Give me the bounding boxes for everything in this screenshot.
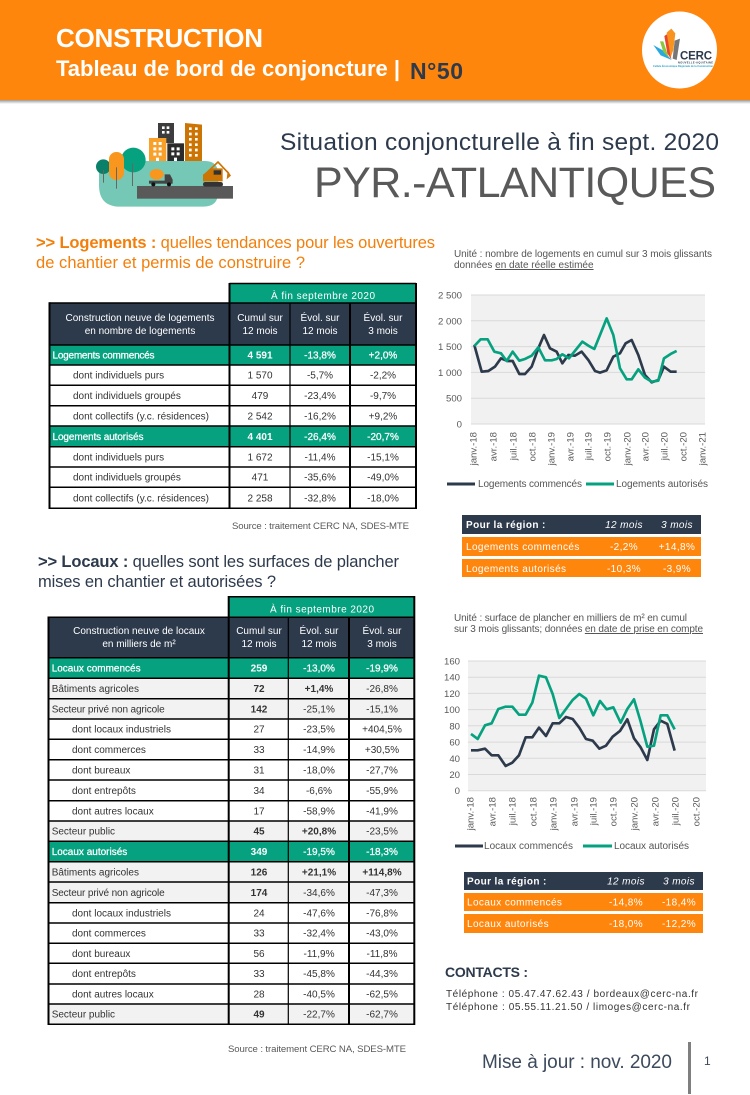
row: locaux industriels: dont locaux industriels bbox=[72, 725, 171, 736]
series: locaux autorisés bbox=[471, 676, 675, 747]
row: locaux industriels: -23,5% bbox=[303, 725, 335, 736]
row: autres locaux: dont autres locaux bbox=[72, 806, 154, 817]
header cells: Évol. sur bbox=[363, 624, 402, 637]
row: collectifs: -32,8% bbox=[304, 493, 336, 504]
y axis labels: 1 500 bbox=[438, 342, 462, 353]
line chart: locaux bbox=[444, 656, 706, 831]
header cells bbox=[66, 289, 403, 337]
region table: locaux: -14,8% bbox=[609, 898, 643, 908]
y axis labels: 80 bbox=[449, 721, 460, 732]
header cells: 3 mois bbox=[367, 639, 397, 650]
x axis labels: janv.-19 bbox=[546, 432, 558, 466]
row: individuels purs: 1 570 bbox=[247, 371, 273, 382]
footer: page number: 1 bbox=[704, 1054, 711, 1068]
heading: department: PYR.-ATLANTIQUES bbox=[314, 159, 716, 207]
row: individuels groupés: -23,4% bbox=[304, 391, 336, 402]
header cells: Évol. sur bbox=[364, 311, 403, 324]
header cells: 3 mois bbox=[368, 326, 398, 337]
row: logements commencés: -13,8% bbox=[304, 350, 336, 362]
row: individuels purs bbox=[73, 452, 399, 463]
legend: logements: Logements autorisés bbox=[616, 479, 708, 490]
y axis labels: 1 000 bbox=[438, 368, 462, 379]
x axis labels: avr.-18 bbox=[488, 797, 498, 826]
row: locaux autorisés: -18,3% bbox=[366, 847, 398, 858]
header cells: Évol. sur bbox=[301, 311, 340, 324]
row: secteur privé bbox=[48, 699, 414, 719]
region table: logements: Pour la région : bbox=[466, 520, 546, 531]
y axis labels bbox=[444, 656, 460, 797]
region table: locaux: -12,2% bbox=[662, 919, 696, 930]
row: locaux autorisés: -19,5% bbox=[303, 847, 335, 858]
region table: logements bbox=[462, 515, 701, 577]
region table: locaux: Locaux commencés bbox=[467, 898, 562, 908]
x axis labels: janv.-20 bbox=[630, 797, 640, 831]
legend: logements bbox=[447, 479, 708, 490]
row: locaux industriels bbox=[72, 725, 402, 736]
x axis labels: avr.-20 bbox=[640, 432, 652, 461]
row: individuels groupés bbox=[73, 473, 399, 484]
contacts: CONTACTS : bbox=[445, 964, 528, 980]
row: bureaux: -11,8% bbox=[367, 949, 398, 960]
y axis labels: 20 bbox=[449, 770, 460, 781]
header cells: 12 mois bbox=[301, 639, 337, 650]
logo: CERC bbox=[642, 12, 717, 88]
row: locaux commencés: Locaux commencés bbox=[52, 664, 141, 674]
row: entrepôts: -6,6% bbox=[306, 786, 332, 797]
row: commerces: dont commerces bbox=[72, 929, 146, 940]
region table: logements: +14,8% bbox=[659, 542, 695, 553]
row: individuels groupés: -9,7% bbox=[370, 391, 396, 402]
row: bâtiments agricoles bbox=[48, 678, 414, 699]
x axis labels: juil.-18 bbox=[508, 797, 518, 826]
row: individuels groupés: 479 bbox=[252, 391, 269, 402]
x axis labels: oct.-18 bbox=[528, 797, 540, 826]
row: locaux commencés: 259 bbox=[251, 664, 268, 674]
row: locaux autorisés: Locaux autorisés bbox=[52, 847, 127, 858]
row: locaux industriels: 27 bbox=[253, 725, 265, 736]
contacts: Téléphone : 05.47.47.62.43 / bordeaux@cerc-na.fr bbox=[446, 989, 699, 1000]
region table: logements: Logements commencés bbox=[466, 542, 580, 553]
line chart: logements bbox=[438, 290, 708, 466]
header cells: Cumul sur bbox=[236, 626, 282, 637]
row: individuels purs bbox=[73, 371, 396, 382]
y axis labels: 140 bbox=[444, 673, 460, 684]
heading: locaux: mises en chantier et autorisées ? bbox=[38, 573, 276, 591]
row: bâtiments agricoles: 126 bbox=[251, 867, 268, 878]
x axis labels: avr.-20 bbox=[650, 797, 662, 826]
row: bâtiments agricoles: -26,8% bbox=[366, 684, 398, 695]
y axis labels: 2 500 bbox=[438, 290, 462, 302]
row: logements autorisés bbox=[50, 426, 416, 447]
region table: locaux: Locaux autorisés bbox=[467, 919, 549, 930]
x axis labels: oct.-18 bbox=[528, 432, 538, 461]
row: logements commencés bbox=[50, 345, 416, 365]
x axis labels: janv.-19 bbox=[548, 797, 560, 831]
row: autres locaux: 28 bbox=[253, 990, 265, 1000]
header cells: en nombre de logements bbox=[85, 326, 195, 337]
y axis labels: 2 000 bbox=[438, 316, 462, 327]
x axis labels: janv.-18 bbox=[466, 797, 476, 831]
row: individuels groupés: 471 bbox=[252, 473, 269, 484]
row: bâtiments agricoles: Bâtiments agricoles bbox=[52, 867, 139, 878]
row: bâtiments agricoles: +21,1% bbox=[302, 867, 336, 878]
row: bureaux: 31 bbox=[253, 765, 265, 776]
row: bâtiments agricoles bbox=[48, 862, 414, 882]
icon: city and construction illustration bbox=[96, 123, 233, 207]
row: secteur public: +20,8% bbox=[302, 827, 336, 838]
y axis labels: 100 bbox=[444, 705, 460, 716]
region table: logements: -3,9% bbox=[663, 564, 691, 575]
row: locaux commencés bbox=[48, 658, 414, 678]
row: entrepôts bbox=[72, 969, 398, 980]
row: secteur public: -23,5% bbox=[366, 827, 398, 838]
series: logements commencés bbox=[474, 335, 677, 382]
region table: locaux: 3 mois bbox=[663, 876, 695, 888]
row: locaux industriels: -47,6% bbox=[303, 908, 335, 919]
x axis labels: juil.-20 bbox=[660, 432, 670, 461]
row: entrepôts: -45,8% bbox=[303, 969, 335, 980]
table: logements bbox=[50, 283, 416, 509]
row: logements commencés: 4 591 bbox=[247, 350, 273, 362]
row: individuels purs: dont individuels purs bbox=[73, 371, 164, 382]
logo: CERC: NOUVELLE-AQUITAINE bbox=[678, 60, 713, 64]
issue number: N°50 bbox=[410, 58, 463, 84]
row: commerces: 33 bbox=[253, 745, 265, 756]
series: logements autorisés bbox=[474, 318, 677, 382]
header cells: 12 mois bbox=[302, 326, 338, 337]
row: locaux industriels bbox=[72, 908, 398, 919]
row: individuels purs: -11,4% bbox=[305, 452, 336, 463]
header cells bbox=[73, 602, 402, 650]
row: bureaux: -18,0% bbox=[303, 765, 335, 776]
row: collectifs bbox=[73, 493, 399, 504]
title: construction: CONSTRUCTION bbox=[56, 23, 263, 53]
region table: locaux: -18,4% bbox=[662, 898, 696, 908]
row: secteur public bbox=[48, 821, 414, 841]
row: autres locaux: dont autres locaux bbox=[72, 990, 154, 1000]
row: locaux industriels: dont locaux industriels bbox=[72, 908, 171, 919]
region table: locaux: Pour la région : bbox=[467, 876, 547, 888]
region table: logements: 12 mois bbox=[605, 520, 643, 531]
y axis labels: 160 bbox=[444, 656, 460, 668]
source: logements: Source : traitement CERC NA, SDES-MTE bbox=[232, 521, 409, 532]
row: individuels groupés: -35,6% bbox=[304, 473, 336, 484]
y axis labels: 40 bbox=[449, 754, 460, 765]
row: logements autorisés: -20,7% bbox=[367, 432, 399, 443]
x axis labels bbox=[468, 432, 708, 466]
row: bureaux bbox=[72, 765, 398, 776]
row: logements commencés: +2,0% bbox=[369, 350, 397, 362]
source: locaux: Source : traitement CERC NA, SDES-MTE bbox=[228, 1044, 406, 1055]
row: entrepôts: dont entrepôts bbox=[72, 786, 136, 797]
row: secteur public bbox=[48, 1004, 414, 1024]
legend: logements: Logements commencés bbox=[478, 479, 582, 490]
footer: update date: Mise à jour : nov. 2020 bbox=[482, 1052, 672, 1073]
row: entrepôts: dont entrepôts bbox=[72, 969, 136, 980]
row: entrepôts: -55,9% bbox=[366, 786, 398, 797]
chart note: logements: Unité : nombre de logements en cumul sur 3 mois glissants bbox=[454, 249, 712, 260]
x axis labels: avr.-19 bbox=[570, 797, 580, 826]
row: autres locaux: -40,5% bbox=[303, 990, 335, 1000]
header cells: en milliers de m² bbox=[102, 639, 176, 650]
row: individuels groupés: dont individuels groupés bbox=[73, 391, 181, 402]
row: collectifs: dont collectifs (y.c. résidences) bbox=[73, 411, 209, 422]
row: logements autorisés: -26,4% bbox=[304, 432, 336, 443]
subtitle: Tableau de bord de conjoncture | bbox=[56, 56, 400, 81]
chart note: logements: données en date réelle estimée bbox=[454, 260, 594, 271]
row: secteur public: -22,7% bbox=[303, 1010, 335, 1021]
y axis labels: 60 bbox=[449, 738, 460, 749]
row: commerces: -14,9% bbox=[303, 745, 335, 756]
heading: locaux bbox=[38, 553, 400, 591]
region table: logements: Logements autorisés bbox=[466, 564, 566, 575]
row: locaux commencés: -13,0% bbox=[303, 664, 335, 674]
row: individuels purs: -2,2% bbox=[370, 371, 396, 382]
row: individuels purs: dont individuels purs bbox=[73, 452, 164, 463]
heading: locaux: >> Locaux : quelles sont les surfaces de plancher bbox=[38, 553, 400, 571]
row: bureaux: 56 bbox=[253, 949, 265, 960]
header cells: 12 mois bbox=[241, 639, 277, 650]
row: individuels groupés: -49,0% bbox=[367, 473, 399, 484]
row: collectifs: -16,2% bbox=[304, 411, 336, 422]
y axis labels: 120 bbox=[444, 689, 460, 700]
row: commerces bbox=[72, 929, 398, 940]
row: individuels groupés: dont individuels groupés bbox=[73, 473, 181, 484]
legend: locaux bbox=[455, 841, 689, 852]
header cells: À fin septembre 2020 bbox=[271, 289, 375, 302]
heading: logements bbox=[36, 234, 435, 272]
contacts bbox=[445, 964, 699, 1013]
header cells: Construction neuve de locaux bbox=[73, 626, 205, 637]
row: bureaux: dont bureaux bbox=[72, 765, 130, 776]
row: entrepôts: 33 bbox=[253, 969, 265, 980]
contacts: Téléphone : 05.55.11.21.50 / limoges@cerc-na.fr bbox=[446, 1002, 691, 1013]
legend: locaux: Locaux commencés bbox=[484, 841, 573, 852]
row: autres locaux: 17 bbox=[253, 806, 265, 817]
row: locaux autorisés: 349 bbox=[251, 847, 268, 858]
x axis labels: oct.-20 bbox=[678, 432, 690, 461]
y axis labels: 0 bbox=[455, 786, 460, 797]
row: bureaux: -11,9% bbox=[304, 949, 335, 960]
row: commerces: 33 bbox=[253, 929, 265, 940]
row: commerces: dont commerces bbox=[72, 745, 146, 756]
heading: situation: Situation conjoncturelle à fin sept. 2020 bbox=[280, 129, 719, 156]
row: autres locaux: -41,9% bbox=[366, 806, 398, 817]
row: locaux autorisés bbox=[48, 841, 414, 862]
row: collectifs: 2 258 bbox=[247, 493, 273, 504]
row: secteur privé: Secteur privé non agricole bbox=[52, 888, 165, 899]
y axis labels: 500 bbox=[446, 394, 462, 405]
row: secteur privé: -34,6% bbox=[303, 888, 335, 899]
heading: logements: >> Logements : quelles tendances pour les ouvertures bbox=[36, 234, 435, 252]
row: secteur privé bbox=[48, 882, 414, 903]
row: entrepôts: -44,3% bbox=[366, 969, 398, 980]
row: bureaux bbox=[72, 949, 398, 960]
x axis labels: janv.-18 bbox=[468, 432, 480, 466]
row: bureaux: dont bureaux bbox=[72, 949, 130, 960]
row: bâtiments agricoles: +1,4% bbox=[305, 684, 333, 695]
heading: logements: de chantier et permis de construire ? bbox=[36, 254, 305, 272]
row: locaux industriels: +404,5% bbox=[362, 725, 402, 736]
chart note: locaux: Unité : surface de plancher en milliers de m² en cumul bbox=[454, 613, 687, 624]
row: commerces: -32,4% bbox=[303, 929, 335, 940]
region table: logements: -10,3% bbox=[607, 564, 641, 575]
row: bâtiments agricoles: Bâtiments agricoles bbox=[52, 684, 139, 695]
x axis labels: juil.-19 bbox=[584, 432, 594, 461]
y axis labels bbox=[438, 290, 462, 430]
row: collectifs: +9,2% bbox=[369, 411, 397, 422]
row: bâtiments agricoles: +114,8% bbox=[362, 867, 402, 878]
chart note: locaux bbox=[454, 613, 703, 635]
region table: locaux: 12 mois bbox=[607, 876, 645, 888]
row: autres locaux bbox=[72, 806, 398, 817]
chart note: locaux: sur 3 mois glissants; données en date de prise en compte bbox=[454, 624, 703, 635]
header cells: Évol. sur bbox=[300, 624, 339, 637]
row: secteur privé: -25,1% bbox=[303, 704, 335, 715]
region table: logements: -2,2% bbox=[610, 542, 638, 553]
x axis labels: avr.-18 bbox=[488, 432, 500, 461]
row: entrepôts bbox=[72, 786, 398, 797]
row: secteur privé: Secteur privé non agricole bbox=[52, 704, 165, 715]
row: bureaux: -27,7% bbox=[366, 765, 398, 776]
row: logements commencés: Logements commencés bbox=[52, 350, 154, 362]
row: autres locaux: -58,9% bbox=[303, 806, 335, 817]
logo: CERC: Cellule Économique Régionale de la Construction bbox=[653, 63, 713, 68]
x axis labels: janv.-20 bbox=[622, 432, 634, 466]
row: commerces bbox=[72, 745, 399, 756]
header cells: Cumul sur bbox=[237, 313, 283, 324]
row: autres locaux: -62,5% bbox=[366, 990, 398, 1000]
series: locaux commencés bbox=[471, 717, 675, 766]
x axis labels: oct.-20 bbox=[692, 797, 702, 826]
row: individuels purs: -15,1% bbox=[367, 452, 399, 463]
header cells: Construction neuve de logements bbox=[66, 313, 214, 324]
row: collectifs: -18,0% bbox=[367, 493, 399, 504]
region table: locaux bbox=[464, 872, 703, 933]
x axis labels: oct.-19 bbox=[608, 797, 620, 826]
header cells: 12 mois bbox=[242, 326, 278, 337]
region table: locaux: -18,0% bbox=[609, 919, 643, 930]
row: collectifs: 2 542 bbox=[247, 411, 273, 422]
row: logements autorisés: 4 401 bbox=[247, 432, 273, 443]
row: entrepôts: 34 bbox=[253, 786, 265, 797]
row: collectifs bbox=[73, 411, 397, 422]
row: locaux commencés: -19,9% bbox=[366, 664, 398, 674]
legend: locaux: Locaux autorisés bbox=[614, 841, 689, 852]
row: secteur privé: 174 bbox=[251, 888, 268, 899]
row: logements autorisés: Logements autorisés bbox=[52, 432, 144, 443]
x axis labels: juil.-19 bbox=[588, 797, 600, 826]
x axis labels bbox=[466, 797, 702, 831]
row: individuels purs: 1 672 bbox=[247, 452, 273, 463]
row: secteur public: 45 bbox=[253, 827, 265, 838]
row: commerces: -43,0% bbox=[366, 929, 398, 940]
header cells: À fin septembre 2020 bbox=[270, 602, 374, 616]
logo: CERC: CERC bbox=[680, 50, 712, 62]
row: bâtiments agricoles: 72 bbox=[253, 684, 265, 695]
row: secteur privé: 142 bbox=[251, 704, 268, 715]
row: locaux industriels: -76,8% bbox=[366, 908, 398, 919]
row: secteur privé: -47,3% bbox=[366, 888, 398, 899]
x axis labels: avr.-19 bbox=[566, 432, 576, 461]
row: individuels groupés bbox=[73, 391, 396, 402]
row: individuels purs: -5,7% bbox=[307, 371, 333, 382]
row: secteur public: Secteur public bbox=[52, 827, 115, 838]
x axis labels: juil.-20 bbox=[670, 797, 682, 826]
y axis labels: 0 bbox=[457, 420, 462, 430]
row: autres locaux bbox=[72, 990, 398, 1000]
region table: logements: 3 mois bbox=[661, 520, 693, 531]
row: secteur public: -62,7% bbox=[366, 1010, 398, 1021]
x axis labels: janv.-21 bbox=[698, 432, 708, 466]
row: collectifs: dont collectifs (y.c. résidences) bbox=[73, 493, 209, 504]
row: secteur public: Secteur public bbox=[52, 1010, 115, 1021]
x axis labels: juil.-18 bbox=[508, 432, 520, 461]
x axis labels: oct.-19 bbox=[602, 432, 614, 461]
table: locaux bbox=[48, 596, 414, 1025]
header band bbox=[0, 0, 750, 104]
row: locaux industriels: 24 bbox=[253, 908, 265, 919]
row: commerces: +30,5% bbox=[365, 745, 399, 756]
row: secteur privé: -15,1% bbox=[366, 704, 398, 715]
chart note: logements bbox=[454, 249, 712, 271]
row: secteur public: 49 bbox=[253, 1010, 265, 1021]
